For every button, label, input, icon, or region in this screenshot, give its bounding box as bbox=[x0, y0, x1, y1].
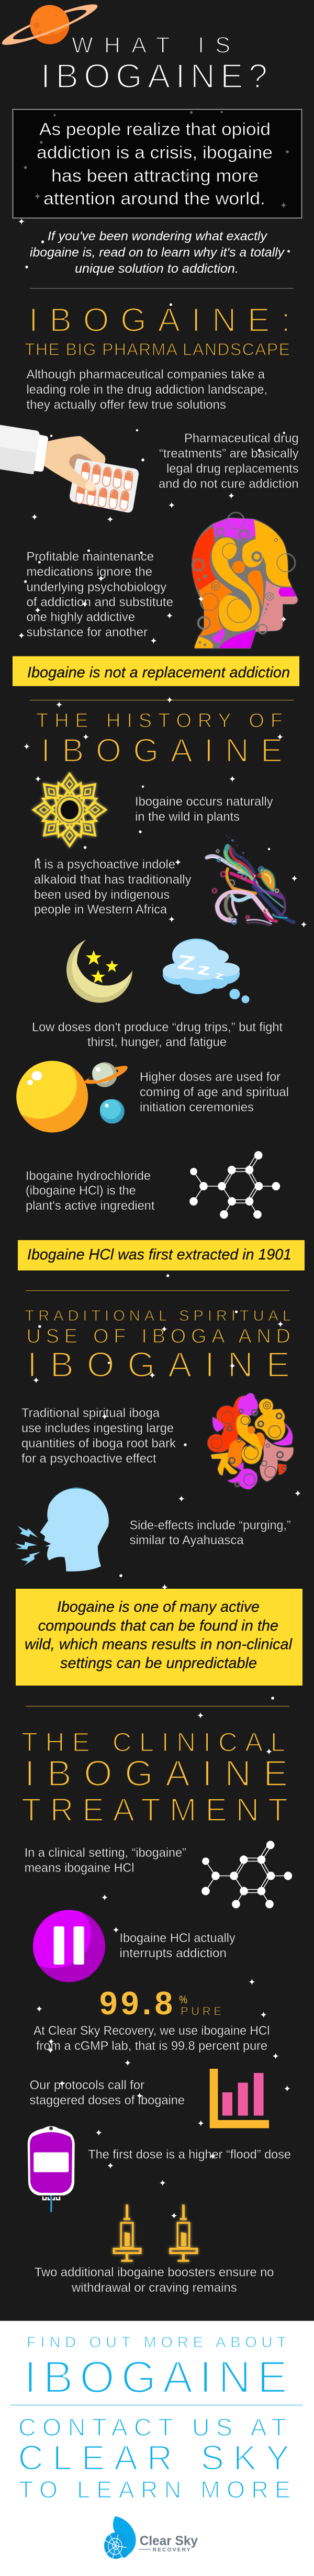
heading: the history of ibogaine: THE HISTORY OF bbox=[36, 710, 283, 732]
text: clear sky purity: At Clear Sky Recovery, we use ibogaine HCl bbox=[33, 2024, 270, 2038]
icon: colourful swirl head profile bbox=[192, 512, 298, 648]
text: pharma intro bbox=[26, 367, 267, 412]
text: higher doses bbox=[140, 1070, 289, 1114]
heading: traditional spiritual use: USE OF IBOGA AND bbox=[26, 1325, 290, 1347]
text: clear sky purity bbox=[33, 2024, 270, 2053]
text: pharmaceutical treatments: “treatments” are basically bbox=[159, 447, 299, 461]
text: maintenance medications: of addiction and substitute bbox=[26, 595, 173, 609]
text: maintenance medications: Profitable maintenance bbox=[26, 550, 154, 564]
text: occurs naturally: in the wild in plants bbox=[135, 810, 240, 824]
text: traditional use: quantities of iboga root bark bbox=[21, 1436, 176, 1451]
text: side effects: Side-effects include “purging,” bbox=[130, 1518, 291, 1532]
footer heading: contact us bbox=[18, 2413, 290, 2503]
text: boosters bbox=[35, 2266, 274, 2295]
heading: traditional spiritual use: TRADITIONAL SPIRITUAL bbox=[25, 1308, 291, 1324]
logo: Clear Sky Recovery bbox=[104, 2516, 198, 2559]
text: psychoactive alkaloid: It is a psychoactive indole bbox=[34, 857, 175, 872]
text: maintenance medications bbox=[26, 550, 173, 640]
text: clinical setting: means ibogaine HCl bbox=[25, 1861, 134, 1875]
text: occurs naturally bbox=[135, 795, 273, 824]
footer heading: find out more: FIND OUT MORE ABOUT bbox=[27, 2334, 286, 2351]
panel: intro statement: addiction is a crisis, ibogaine bbox=[37, 143, 273, 162]
text: active ingredient: Ibogaine hydrochloride bbox=[26, 1169, 151, 1183]
heading: big pharma landscape: IBOGAINE: bbox=[29, 301, 290, 339]
footer heading: contact us: TO LEARN MORE bbox=[19, 2476, 290, 2503]
text: pharma intro: they actually offer few true solutions bbox=[26, 398, 226, 412]
stat: 99.8 percent pure bbox=[99, 1986, 221, 2022]
text: staggered doses: Our protocols call for bbox=[30, 2078, 144, 2092]
panel: intro statement: attention around the world. bbox=[43, 189, 265, 208]
title: IBOGAINE? bbox=[41, 57, 267, 95]
panel: intro statement: has been attracting more bbox=[51, 166, 259, 185]
text: interrupts addiction: interrupts addiction bbox=[119, 1946, 227, 1960]
text: traditional use: use includes ingesting large bbox=[21, 1421, 174, 1435]
callout: active compounds: Ibogaine is one of many active bbox=[57, 1599, 260, 1615]
heading: the clinical ibogaine treatment: TREATMENT bbox=[21, 1792, 288, 1828]
icon: pause button bbox=[33, 1910, 105, 1982]
callout: not a replacement: Ibogaine is not a replacement addiction bbox=[27, 664, 290, 681]
text: pharma intro: leading role in the drug addiction landscape, bbox=[26, 383, 267, 397]
intro italic text: If you've been wondering what exactly bbox=[48, 229, 268, 243]
text: low doses: thirst, hunger, and fatigue bbox=[87, 1035, 227, 1050]
title: WHAT IS bbox=[72, 32, 230, 58]
text: psychoactive alkaloid bbox=[34, 857, 192, 917]
heading: the history of ibogaine: IBOGAINE bbox=[41, 732, 283, 769]
icon: sleep thought cloud bbox=[163, 939, 249, 1003]
text: clinical setting: In a clinical setting, “ibogaine” bbox=[25, 1846, 186, 1860]
text: psychoactive alkaloid: people in Western Africa bbox=[34, 902, 167, 917]
heading: the clinical ibogaine treatment bbox=[21, 1727, 288, 1828]
text: clinical setting bbox=[25, 1846, 186, 1875]
text: higher doses: initiation ceremonies bbox=[140, 1100, 254, 1114]
text: maintenance medications: one highly addictive bbox=[26, 610, 135, 625]
text: traditional use: Traditional spiritual iboga bbox=[21, 1406, 160, 1420]
text: boosters: Two additional ibogaine boosters ensure no bbox=[35, 2266, 274, 2279]
title bbox=[41, 32, 267, 95]
callout: active compounds: wild, which means results in non-clinical bbox=[25, 1636, 293, 1653]
callout: not a replacement bbox=[13, 656, 299, 686]
icon: psychedelic swirl bbox=[207, 835, 294, 925]
text: boosters: withdrawal or craving remains bbox=[71, 2281, 237, 2295]
callout: active compounds: settings can be unpredictable bbox=[60, 1655, 257, 1672]
icon: hand holding blister pack bbox=[0, 425, 139, 512]
text: flood dose: The first dose is a higher “flood” dose bbox=[88, 2148, 291, 2162]
text: higher doses: Higher doses are used for bbox=[140, 1070, 281, 1084]
callout: first extracted bbox=[18, 1240, 305, 1270]
heading: the clinical ibogaine treatment: IBOGAINE bbox=[25, 1753, 288, 1794]
icon: colourful swirl bouquet bbox=[208, 1393, 294, 1489]
text: staggered doses bbox=[30, 2078, 185, 2107]
icon: sleep thought cloud: Z bbox=[176, 951, 196, 975]
text: pharmaceutical treatments: legal drug replacements bbox=[166, 462, 299, 476]
text: active ingredient bbox=[26, 1169, 155, 1213]
intro italic text bbox=[30, 229, 285, 276]
icon: sleep thought cloud: z bbox=[196, 960, 211, 979]
text: active ingredient: (ibogaine HCl) is the bbox=[26, 1184, 136, 1198]
text: side effects: similar to Ayahuasca bbox=[130, 1533, 244, 1547]
text: traditional use: for a psychoactive effect bbox=[21, 1452, 156, 1466]
text: low doses bbox=[32, 1020, 283, 1050]
bar chart: rising doses bbox=[210, 2069, 269, 2128]
heading: traditional spiritual use: IBOGAINE bbox=[27, 1345, 290, 1385]
footer heading: contact us: CLEAR SKY bbox=[18, 2438, 289, 2478]
logo: Clear Sky Recovery: Clear Sky bbox=[140, 2534, 198, 2548]
text: pharmaceutical treatments bbox=[159, 431, 299, 491]
text: higher doses: coming of age and spiritual bbox=[140, 1085, 289, 1099]
icon: golden sun mandala bbox=[33, 774, 106, 846]
intro italic text: unique solution to addiction. bbox=[75, 262, 239, 276]
heading: the clinical ibogaine treatment: THE CLINICAL bbox=[21, 1727, 285, 1757]
icon: molecule bbox=[189, 1151, 280, 1219]
text: maintenance medications: medications ignore the bbox=[26, 565, 152, 579]
callout: first extracted: Ibogaine HCl was first extracted in 1901 bbox=[27, 1246, 291, 1263]
text: maintenance medications: underlying psychobiology bbox=[26, 580, 166, 595]
icon: ringed orange planet bbox=[2, 4, 97, 45]
text: occurs naturally: Ibogaine occurs naturally bbox=[135, 795, 273, 809]
icon: blue head purging bbox=[15, 1488, 109, 1571]
callout: active compounds bbox=[16, 1589, 302, 1686]
text: interrupts addiction: Ibogaine HCl actually bbox=[119, 1931, 236, 1945]
logo: Clear Sky Recovery: RECOVERY bbox=[153, 2547, 190, 2553]
footer heading: contact us: CONTACT US AT bbox=[18, 2413, 286, 2441]
icon: syringes bbox=[113, 2205, 198, 2262]
text: traditional use bbox=[21, 1406, 176, 1466]
icon: sleep thought cloud: z bbox=[214, 970, 225, 982]
icon: crescent moon with stars bbox=[66, 938, 132, 1003]
footer heading: find out more: IBOGAINE bbox=[24, 2352, 287, 2403]
heading: traditional spiritual use bbox=[25, 1308, 291, 1385]
panel: intro statement bbox=[13, 109, 301, 218]
icon: IV bag bbox=[28, 2126, 75, 2212]
intro italic text: ibogaine is, read on to learn why it's a totally bbox=[30, 246, 285, 260]
text: clear sky purity: from a cGMP lab, that is 99.8 percent pure bbox=[36, 2039, 267, 2053]
callout: active compounds: compounds that can be found in the bbox=[38, 1618, 278, 1634]
icon: planets bbox=[16, 1061, 128, 1133]
stars bbox=[18, 111, 307, 2219]
text: active ingredient: plant's active ingredient bbox=[26, 1199, 155, 1213]
text: pharma intro: Although pharmaceutical companies take a bbox=[26, 367, 265, 382]
stat: 99.8 percent pure: 99.8 bbox=[99, 1986, 173, 2022]
icon: molecule two bbox=[201, 1841, 292, 1909]
stat: 99.8 percent pure: PURE bbox=[181, 2005, 221, 2017]
text: psychoactive alkaloid: alkaloid that has traditionally bbox=[34, 873, 192, 887]
text: side effects bbox=[130, 1518, 291, 1547]
white footer background bbox=[0, 2321, 314, 2576]
text: staggered doses: staggered doses of ibogaine bbox=[30, 2093, 185, 2107]
text: interrupts addiction bbox=[119, 1931, 236, 1960]
text: low doses: Low doses don't produce “drug trips,” but fight bbox=[32, 1020, 283, 1034]
stat: 99.8 percent pure: % bbox=[179, 1994, 187, 2006]
text: maintenance medications: substance for another bbox=[26, 626, 148, 640]
panel: intro statement: As people realize that opioid bbox=[39, 119, 271, 139]
text: pharmaceutical treatments: and do not cure addiction bbox=[159, 477, 299, 491]
text: pharmaceutical treatments: Pharmaceutical drug bbox=[184, 431, 299, 445]
heading: big pharma landscape bbox=[25, 301, 290, 359]
text: psychoactive alkaloid: been used by indigenous bbox=[34, 888, 170, 902]
heading: the history of ibogaine bbox=[36, 710, 283, 769]
heading: big pharma landscape: THE BIG PHARMA LANDSCAPE bbox=[25, 340, 290, 359]
